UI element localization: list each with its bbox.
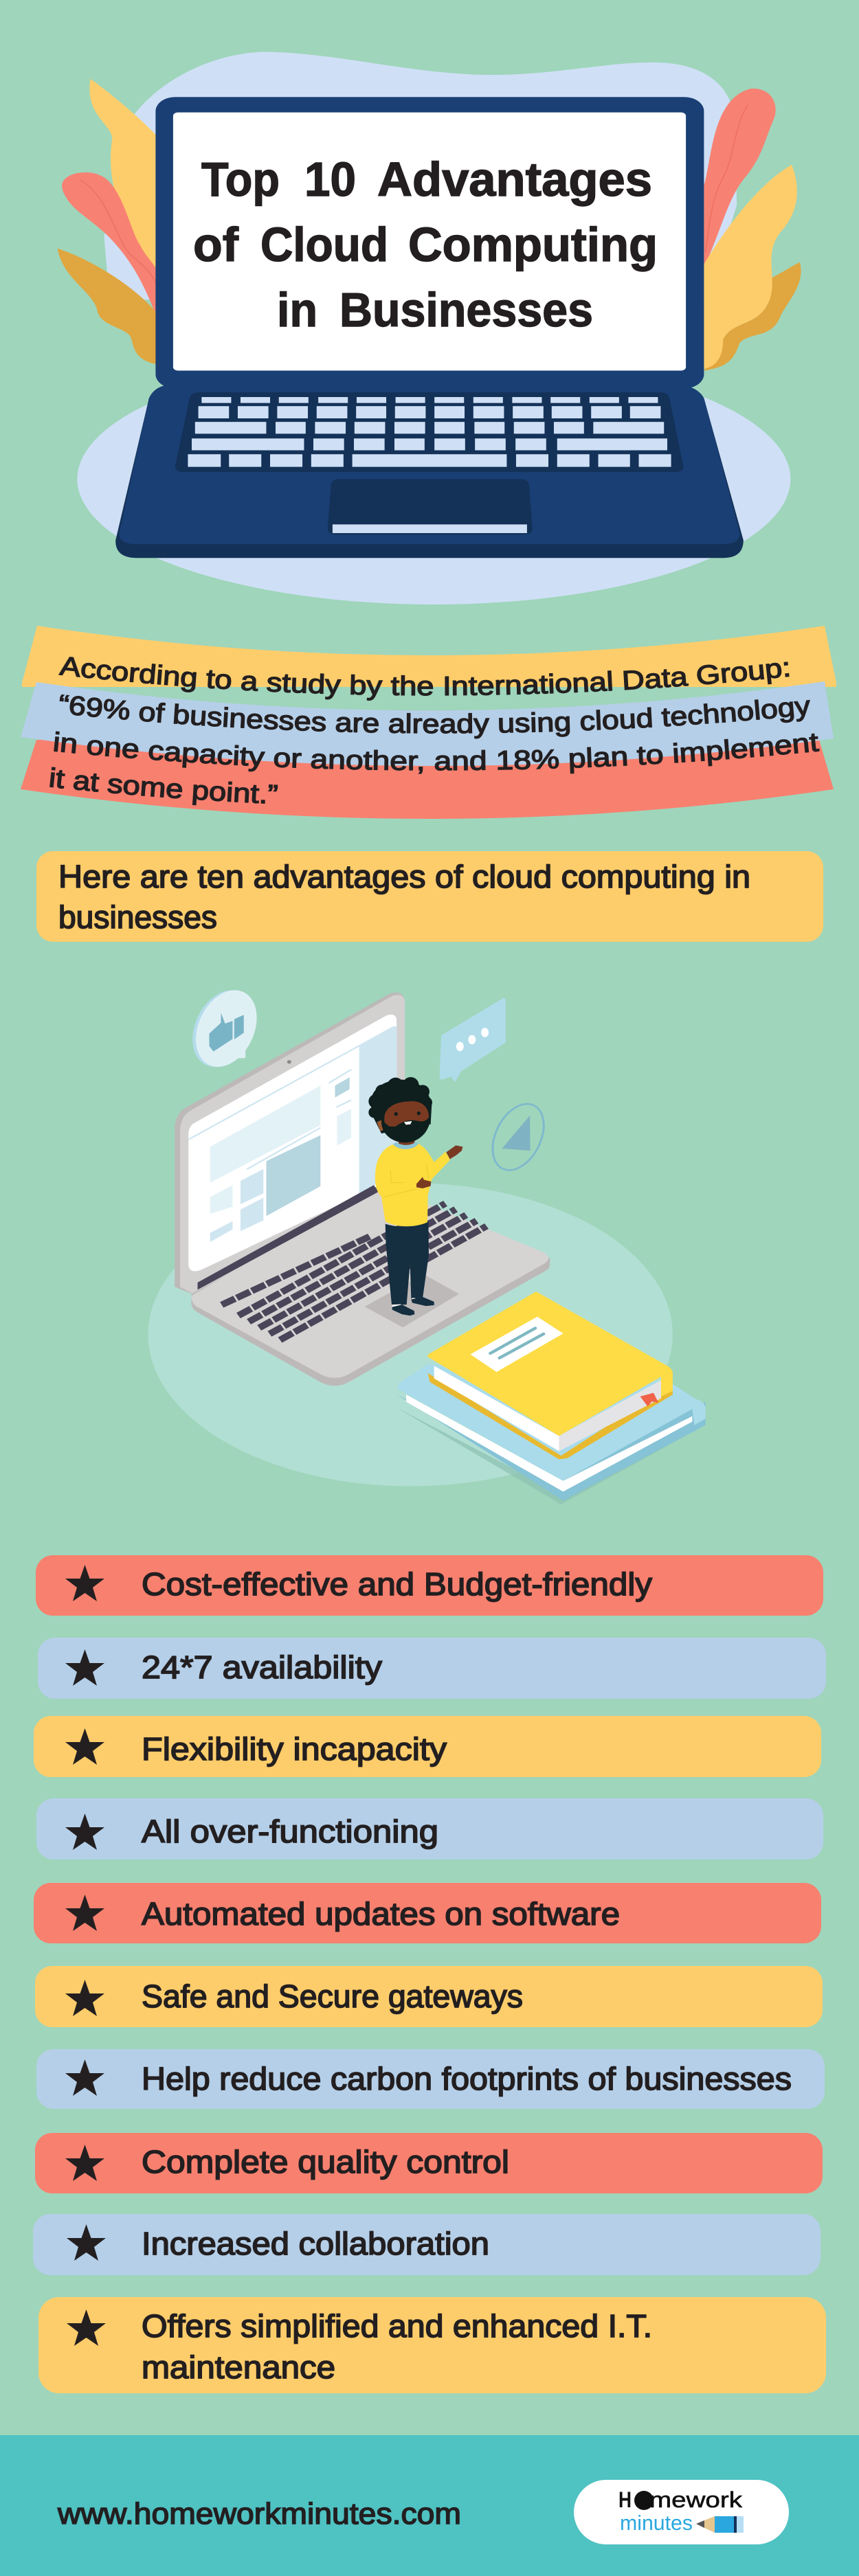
item 3 <box>34 1716 821 1777</box>
isometric illustration: laptop, icons and books <box>148 984 706 1504</box>
title: 10 <box>304 152 356 206</box>
red band <box>21 740 834 819</box>
list: ten advantages <box>33 1555 826 2393</box>
quote text: in one capacity or another, and 18% plan to implement <box>54 731 820 774</box>
laptop screen <box>155 97 704 388</box>
title: of <box>193 218 239 271</box>
laptop <box>175 993 550 1386</box>
legs and shoes <box>386 1221 434 1315</box>
laptop base <box>115 385 744 558</box>
man with beard standing on laptop <box>368 1077 462 1315</box>
item 10 <box>38 2297 826 2393</box>
item 4: All over-functioning <box>142 1814 438 1849</box>
item 1 <box>36 1555 823 1616</box>
logo pill: H <box>618 2487 632 2512</box>
icon: navigation circle <box>483 1098 553 1176</box>
icon: pencil <box>696 2516 744 2533</box>
title: in <box>277 283 317 337</box>
item 3: Flexibility incapacity <box>142 1731 447 1767</box>
logo pill: mework <box>649 2487 743 2512</box>
blue band <box>21 681 834 766</box>
item 7: Help reduce carbon footprints of businesses <box>142 2061 792 2097</box>
title: Top <box>201 152 280 206</box>
item 10: Offers simplified and enhanced I.T. <box>142 2308 652 2344</box>
title: Advantages <box>377 152 652 206</box>
item 9 <box>33 2214 821 2275</box>
logo pill <box>574 2480 789 2544</box>
keyboard <box>175 392 683 472</box>
item 9: Increased collaboration <box>142 2226 489 2261</box>
icon: chat bubble <box>440 998 506 1082</box>
website url: www.homeworkminutes.com <box>57 2497 461 2531</box>
item 8: Complete quality control <box>142 2144 509 2180</box>
item 2: 24*7 availability <box>142 1649 382 1685</box>
logo pill: minutes <box>620 2511 693 2535</box>
title: Computing <box>408 218 658 271</box>
item 7 <box>36 2049 825 2109</box>
item 5: Automated updates on software <box>142 1896 620 1932</box>
right leaves <box>704 89 801 371</box>
quote text: it at some point.” <box>49 767 278 805</box>
intro callout: businesses <box>58 899 217 935</box>
quote text <box>49 657 820 805</box>
left leaves <box>58 79 159 365</box>
item 8 <box>35 2133 823 2193</box>
item 6 <box>35 1966 823 2027</box>
intro callout: Here are ten advantages of cloud computing in <box>58 859 750 894</box>
background blob <box>77 52 790 605</box>
title: Businesses <box>339 283 593 337</box>
quote text: “69% of businesses are already using cloud technology <box>59 694 810 739</box>
icon: thumbs up bubble <box>182 984 267 1074</box>
item 6: Safe and Secure gateways <box>142 1978 523 2014</box>
trackpad <box>328 479 533 534</box>
item 4 <box>36 1798 823 1860</box>
item 1: Cost-effective and Budget-friendly <box>142 1566 652 1602</box>
stack of books <box>396 1291 706 1504</box>
title: Cloud <box>260 218 388 271</box>
footer band <box>0 2435 859 2576</box>
intro callout <box>36 851 823 942</box>
item 10: maintenance <box>142 2349 335 2385</box>
title <box>193 152 658 337</box>
header laptop illustration <box>58 52 801 605</box>
pale ground ellipse <box>148 1183 673 1487</box>
curved banner with study quote <box>21 626 836 819</box>
item 5 <box>34 1883 821 1943</box>
torso and head <box>368 1077 462 1226</box>
quote text: According to a study by the International Data Group: <box>58 657 790 701</box>
item 2 <box>38 1638 826 1699</box>
yellow band <box>22 626 836 687</box>
